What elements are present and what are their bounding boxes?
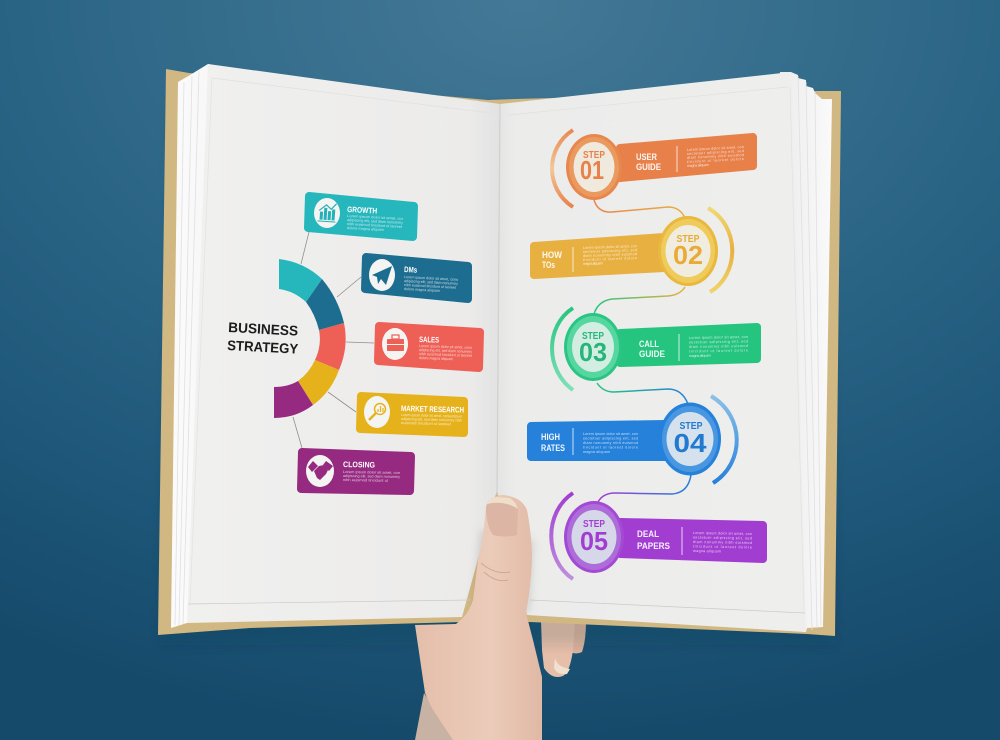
hand with thumb and sleeve	[415, 495, 542, 740]
thumb nail	[486, 497, 518, 536]
body text: tincidunt ut laoreet dolore	[689, 348, 748, 353]
body text: adipiscing elit, sed diam nonummy	[419, 348, 472, 354]
body text: tincidunt ut laoreet dolore	[583, 256, 637, 262]
body text: Lorem ipsum dolor sit amet, con	[693, 531, 752, 536]
icon: briefcase	[387, 335, 404, 351]
body text: adipiscing elit, sed diam nonummy	[404, 279, 458, 286]
left page	[187, 64, 500, 623]
step 2	[534, 208, 732, 292]
body text: Lorem ipsum dolor sit amet, con	[343, 470, 400, 475]
step 3: 03	[579, 337, 607, 367]
body text: euismod tincidunt ut laoreet	[401, 421, 451, 426]
body text: magna aliquam	[583, 261, 603, 266]
step 4: RATES	[541, 443, 565, 453]
sleeve	[415, 693, 455, 740]
body text: Lorem ipsum dolor sit amet, con	[583, 244, 637, 250]
body text: Lorem ipsum dolor sit amet, consectetuer	[401, 413, 463, 419]
nail tip	[487, 497, 518, 509]
step 1: STEP	[583, 150, 605, 161]
body text	[583, 432, 638, 454]
step 2: TOs	[542, 260, 555, 270]
body text	[343, 470, 400, 483]
card: closing	[301, 452, 411, 491]
card: growth: GROWTH	[347, 205, 378, 216]
step 2: 02	[673, 240, 703, 270]
body text: tincidunt ut laoreet dolore	[687, 157, 744, 164]
card: sales	[378, 326, 480, 368]
thumb shadow	[472, 530, 534, 612]
body text	[693, 531, 752, 553]
step 3: CALL	[639, 339, 659, 349]
right page stack	[780, 72, 832, 632]
spine crease	[497, 104, 500, 495]
connector lines	[293, 232, 374, 448]
step 5: PAPERS	[637, 541, 670, 551]
title	[227, 319, 299, 357]
body text: Lorem ipsum dolor sit amet, con	[583, 432, 638, 436]
body text: tincidunt ut laoreet dolore	[693, 545, 752, 550]
body text: adipiscing elit, sed diam nonummy nibh	[401, 417, 462, 423]
body text: nibh euismod tincidunt ut laoreet	[419, 352, 472, 358]
step 1: 01	[580, 155, 604, 185]
step 3: GUIDE	[639, 349, 665, 359]
body text: diam nonummy nibh euismod	[687, 153, 744, 160]
body text: sectetuer adipiscing elit, sed	[583, 436, 638, 440]
body text: Lorem ipsum dolor sit amet, con	[687, 145, 744, 152]
body text	[404, 275, 458, 293]
left page infographic: business strategy	[227, 196, 480, 491]
step 4: HIGH	[541, 432, 560, 442]
body text: diam nonummy nibh euismod	[693, 540, 752, 545]
hand fingers behind book	[541, 620, 586, 677]
body text: sectetuer adipiscing elit, sed	[687, 149, 744, 156]
connectors	[594, 200, 691, 502]
icon: growth chart	[317, 202, 337, 223]
book	[158, 64, 841, 645]
body text: diam nonummy nibh euismod	[583, 252, 637, 258]
icon: handshake	[308, 461, 333, 480]
left page stack	[171, 64, 300, 628]
body text: Lorem ipsum dolor sit amet, cor	[347, 214, 404, 221]
body text	[347, 214, 404, 232]
body text: Lorem ipsum dolor sit amet, cons	[404, 275, 458, 282]
step 3	[552, 308, 757, 390]
body text: magna aliquam	[687, 163, 709, 168]
step 1: USER	[636, 152, 657, 162]
hand	[415, 495, 542, 740]
title: STRATEGY	[227, 337, 299, 357]
title: BUSINESS	[228, 319, 299, 339]
body text	[687, 145, 744, 168]
body text	[583, 244, 637, 266]
step 2: STEP	[676, 234, 700, 245]
step 5: DEAL	[637, 529, 659, 539]
step 4	[531, 396, 737, 483]
body text: adipiscing elit, sed diam nonummy	[343, 474, 400, 479]
step 4: STEP	[680, 421, 703, 432]
card: market research: MARKET RESEARCH	[401, 404, 464, 415]
body text	[401, 413, 463, 426]
body text: sectetuer adipiscing elit, sed	[583, 248, 637, 254]
step 5	[551, 493, 763, 579]
body text: adipiscing elit, sed diam nonummy	[347, 218, 403, 225]
body text: nibh euismod tincidunt ut	[343, 478, 388, 483]
card: growth	[308, 196, 414, 237]
body text: magna aliquam	[689, 354, 711, 358]
body text: sectetuer adipiscing elit, sed	[689, 339, 748, 344]
card: sales: SALES	[419, 335, 440, 345]
right page	[497, 72, 806, 632]
body text: diam nonummy nibh euismod	[689, 344, 748, 349]
page edge lines	[175, 71, 821, 630]
card: DMs	[365, 257, 468, 299]
body text: Lorem ipsum dolor sit amet, cons	[419, 344, 472, 350]
body text: dolore magna aliquam	[419, 356, 453, 361]
step 5: STEP	[583, 519, 605, 530]
book cover	[158, 69, 841, 636]
body text: nibh euismod tincidunt ut laoreet	[404, 283, 456, 290]
step 3: STEP	[582, 331, 604, 342]
card: closing: CLOSING	[343, 460, 375, 470]
icon: paper plane	[372, 266, 392, 285]
card: market research	[360, 396, 464, 433]
step 4: 04	[674, 428, 707, 458]
page fold lines	[188, 78, 805, 613]
step 1	[552, 130, 753, 207]
body text: Lorem ipsum dolor sit amet, con	[689, 335, 748, 340]
step 2: HOW	[542, 250, 562, 260]
body text: magna aliquam	[583, 450, 610, 454]
semicircle chart	[274, 259, 346, 418]
body text	[689, 335, 748, 358]
right page infographic: steps	[531, 130, 763, 579]
step 5: 05	[580, 526, 608, 556]
body text: dolore magna aliquam	[347, 226, 384, 232]
book shadow	[160, 100, 836, 645]
thumb knuckle crease	[481, 563, 510, 581]
body text: sectetuer adipiscing elit, sed	[693, 536, 752, 541]
icon: magnifier	[369, 404, 386, 420]
step 1: GUIDE	[636, 162, 661, 172]
body text: tincidunt ut laoreet dolore	[583, 446, 638, 450]
card: DMs: DMs	[404, 265, 418, 275]
body text: nibh euismod tincidunt ut laoreet	[347, 222, 402, 229]
body text: magna aliquam	[693, 549, 721, 553]
body text	[419, 344, 472, 361]
body text: dolore magna aliquam	[404, 287, 440, 293]
body text: diam nonummy nibh euismod	[583, 441, 638, 445]
